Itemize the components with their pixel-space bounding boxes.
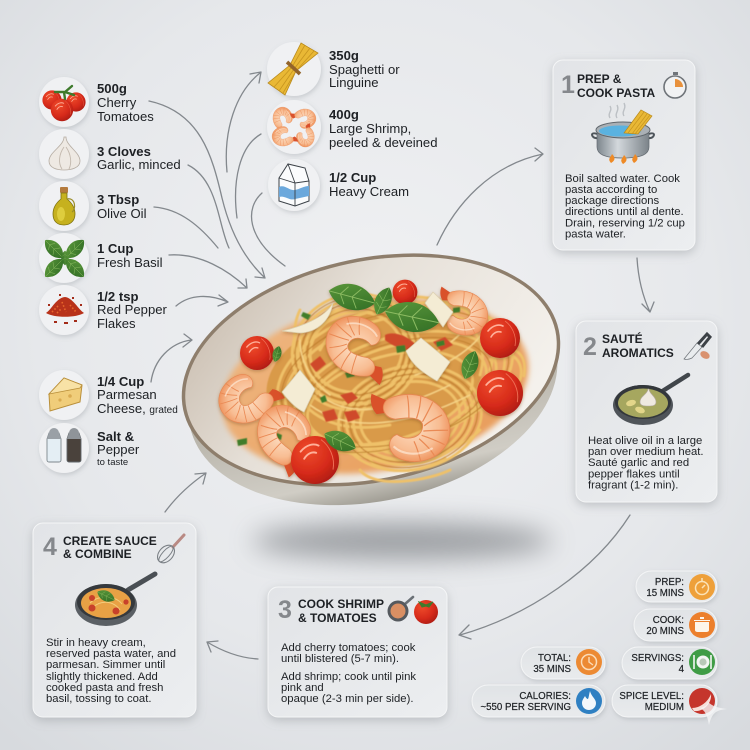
icon: stopwatch <box>664 72 686 98</box>
body text: Sauté garlic and red <box>588 457 689 469</box>
dish: pasta plate <box>160 221 582 537</box>
ingredient: basil: Fresh Basil <box>97 255 163 270</box>
body text: pasta according to <box>565 184 657 196</box>
ingredient: red pepper flakes: 1/2 tsp <box>97 289 138 304</box>
step 4 card <box>33 523 196 717</box>
ingredient: spaghetti: Spaghetti or <box>329 62 400 77</box>
ingredient: salt and pepper: to taste <box>97 457 128 468</box>
arrows from ingredients to dish <box>149 72 654 659</box>
ingredient: spaghetti <box>267 42 400 96</box>
body text: Add cherry tomatoes; cook <box>281 642 416 654</box>
body text: pan over medium heat. <box>588 446 704 458</box>
stat: servings: 4 <box>679 664 685 675</box>
ingredient: olive oil <box>39 181 147 231</box>
ingredient: cherry tomatoes: 500g <box>97 81 127 96</box>
ingredient: salt and pepper: Pepper <box>97 442 140 457</box>
body text: parmesan. Simmer until <box>46 659 165 671</box>
basil leaves <box>271 278 483 457</box>
stat: prep time: PREP: <box>655 577 684 588</box>
shrimp <box>209 287 492 478</box>
ingredient: red pepper flakes: Red Pepper <box>97 302 168 317</box>
ingredient: heavy cream <box>268 159 409 211</box>
stat: spice level <box>612 685 717 717</box>
tomatoes <box>240 280 523 484</box>
body text <box>46 637 176 705</box>
creamy sauce <box>208 275 542 497</box>
icon: pot of boiling pasta <box>592 103 654 164</box>
ingredient: shrimp <box>267 100 437 154</box>
ingredient: heavy cream: Heavy Cream <box>329 184 409 199</box>
ingredient: shrimp: 400g <box>329 107 359 122</box>
ingredient: parmesan <box>39 370 178 420</box>
body text: reserved pasta water, and <box>46 648 176 660</box>
body text: pink and <box>281 682 324 694</box>
ingredient: garlic: Garlic, minced <box>97 157 181 172</box>
ingredient: heavy cream: 1/2 Cup <box>329 170 376 185</box>
body text <box>565 173 685 240</box>
stat: prep time: 15 MINS <box>646 588 685 599</box>
ingredient: parmesan: 1/4 Cup <box>97 374 144 389</box>
step 4 card: CREATE SAUCE <box>63 534 157 548</box>
spaghetti nest <box>254 280 528 482</box>
body text: Heat olive oil in a large <box>588 435 702 447</box>
body text: until blistered (5-7 min). <box>281 653 399 665</box>
body text: basil, tossing to coat. <box>46 693 152 705</box>
ingredient: garlic: 3 Cloves <box>97 144 151 159</box>
ingredient: red pepper flakes: Flakes <box>97 316 136 331</box>
step 3 card: COOK SHRIMP <box>298 597 384 611</box>
stat: spice level: SPICE LEVEL: <box>619 691 684 702</box>
icon: whisk <box>154 535 184 566</box>
stat: cook time: 20 MINS <box>646 626 685 637</box>
ingredient: parmesan: Parmesan <box>97 387 157 402</box>
body text: Add shrimp; cook until pink <box>281 671 416 683</box>
ingredient: parmesan: Cheese, grated <box>97 401 178 416</box>
step 1 card <box>553 60 695 250</box>
ingredient: spaghetti: 350g <box>329 48 359 63</box>
body text: package directions <box>565 195 660 207</box>
body text: directions until al dente. <box>565 206 684 218</box>
step 4 card: & COMBINE <box>63 547 132 561</box>
step 2 card: AROMATICS <box>602 346 674 360</box>
ingredient: olive oil: 3 Tbsp <box>97 192 139 207</box>
plate drop shadow <box>252 522 552 560</box>
stat: calories <box>472 685 605 717</box>
ingredient: shrimp: peeled & deveined <box>329 135 437 150</box>
tomato bits and herbs <box>237 307 460 446</box>
ingredient: olive oil: Olive Oil <box>97 206 147 221</box>
ingredient: basil: 1 Cup <box>97 241 133 256</box>
icon: pan with pasta <box>75 574 155 626</box>
ingredient: salt and pepper <box>39 423 140 473</box>
body text <box>588 435 704 492</box>
body text: cooked pasta and fresh <box>46 682 163 694</box>
body text: Drain, reserving 1/2 cup <box>565 218 685 230</box>
ingredient: cherry tomatoes: Cherry <box>97 95 137 110</box>
step 2 card: SAUTÉ <box>602 331 643 346</box>
stat: total time: TOTAL: <box>538 653 571 664</box>
step 1 card: COOK PASTA <box>577 86 656 100</box>
ingredient: cherry tomatoes <box>39 77 154 127</box>
stat: cook time: COOK: <box>653 615 684 626</box>
ingredient: garlic <box>39 129 181 179</box>
stat: servings <box>622 647 717 679</box>
body text: Boil salted water. Cook <box>565 173 680 185</box>
parmesan shavings <box>282 292 453 412</box>
step 2 card: 2 <box>583 333 597 361</box>
ingredient: basil <box>39 233 163 283</box>
icon: tomato <box>414 600 438 624</box>
stat: total time: 35 MINS <box>533 664 572 675</box>
stat: total time <box>521 647 605 679</box>
step 3 card: & TOMATOES <box>298 611 377 625</box>
icon: pan with garlic <box>613 375 688 425</box>
stat: servings: SERVINGS: <box>631 653 684 664</box>
stat: cook time <box>634 609 717 641</box>
ingredient: shrimp: Large Shrimp, <box>329 121 411 136</box>
stat: calories: ~550 PER SERVING <box>480 702 571 713</box>
body text: pasta water. <box>565 228 626 240</box>
step 4 card: 4 <box>43 533 57 561</box>
body text: slightly thickened. Add <box>46 671 158 683</box>
step 1 card: 1 <box>561 71 575 99</box>
stat: prep time <box>636 571 717 602</box>
body text: Stir in heavy cream, <box>46 637 146 649</box>
body text: pepper flakes until <box>588 468 680 480</box>
ingredient: red pepper flakes <box>39 285 168 335</box>
icon: shrimp pan <box>388 597 413 622</box>
icon: sparkle <box>700 702 727 725</box>
ingredient: cherry tomatoes: Tomatoes <box>97 109 154 124</box>
ingredient: spaghetti: Linguine <box>329 75 379 90</box>
step 3 card: 3 <box>278 596 292 624</box>
body text <box>281 642 416 705</box>
body text: fragrant (1-2 min). <box>588 480 678 492</box>
ingredient: salt and pepper: Salt & <box>97 429 135 444</box>
stat: calories: CALORIES: <box>519 691 571 702</box>
step 1 card: PREP & <box>577 72 622 86</box>
icon: knife <box>684 334 711 361</box>
plate <box>160 221 582 537</box>
stat: spice level: MEDIUM <box>645 702 684 713</box>
body text: opaque (2-3 min per side). <box>281 693 414 705</box>
step 3 card <box>268 587 447 717</box>
step 2 card <box>576 321 717 502</box>
